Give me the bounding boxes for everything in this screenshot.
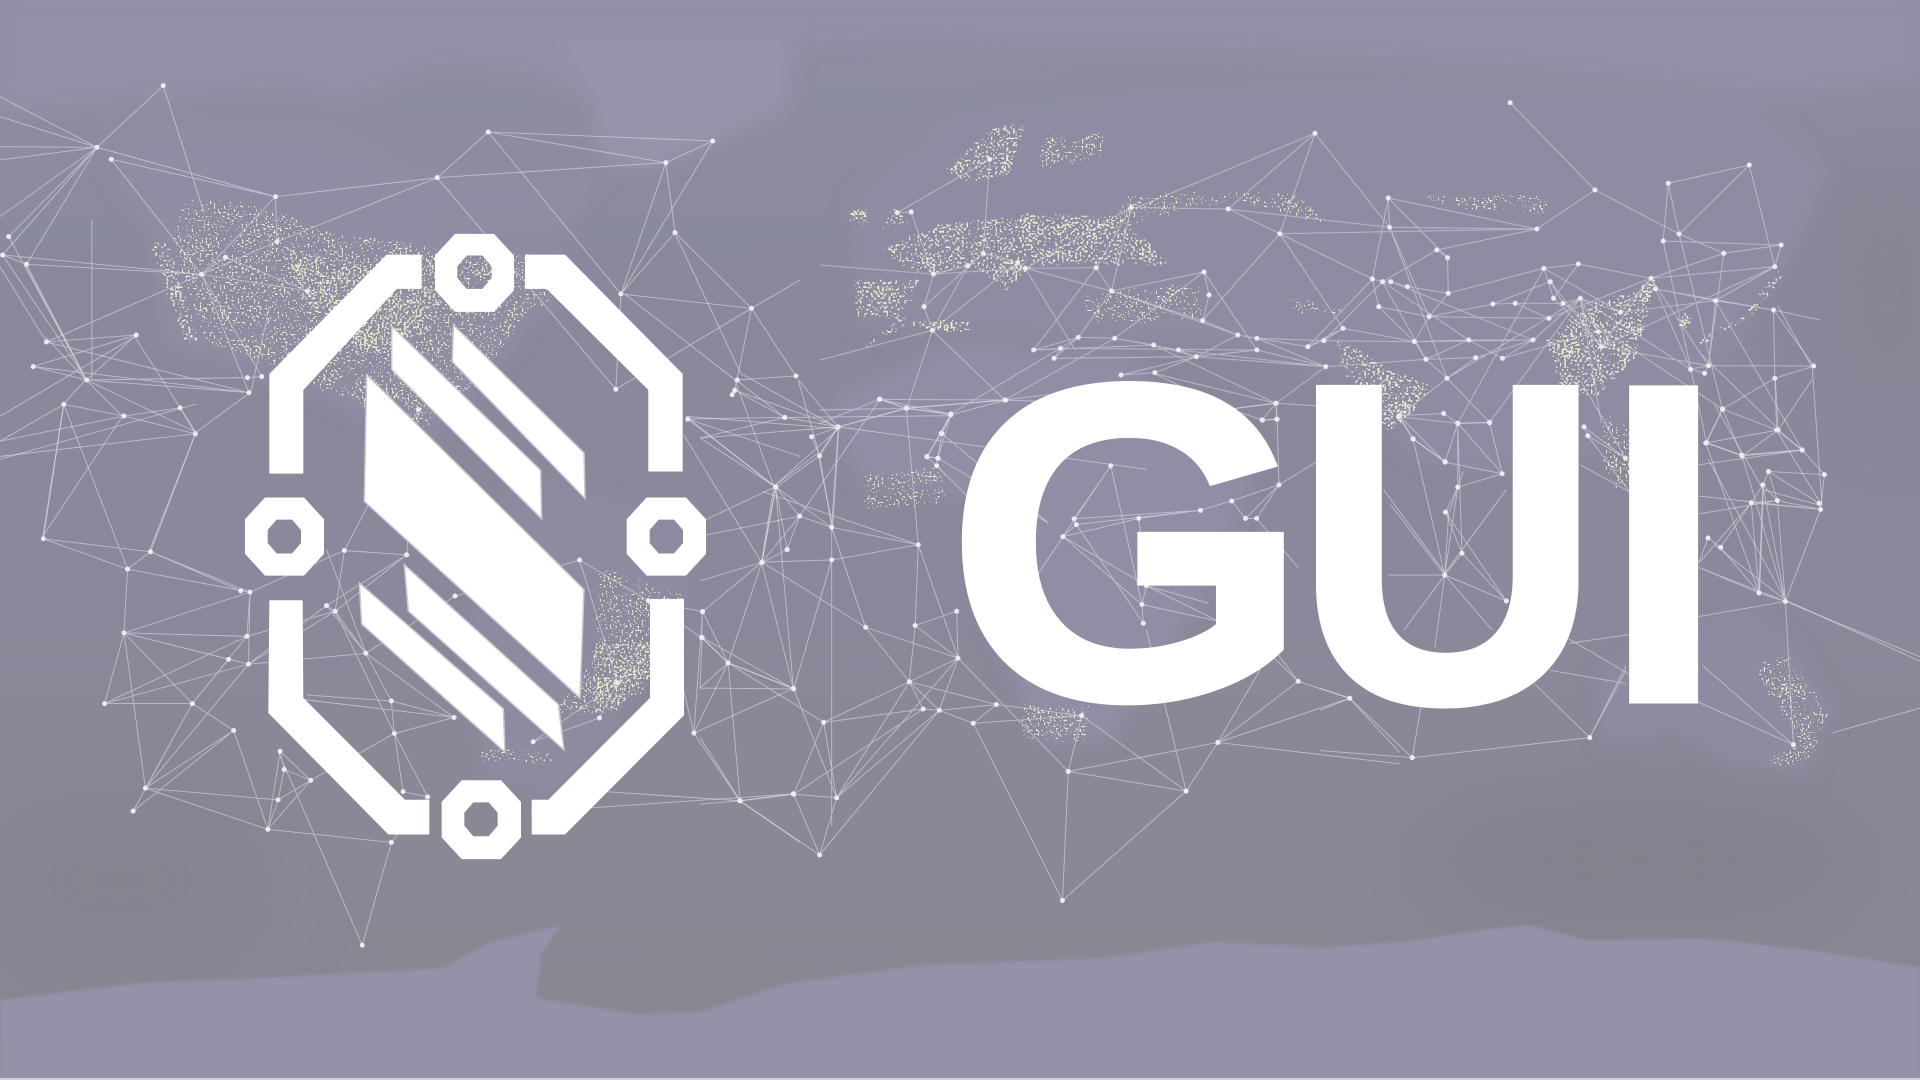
network: north-west lines and nodes: [0, 86, 800, 393]
logo: bottom ring: [442, 780, 521, 859]
antarctica: [0, 925, 1920, 1080]
logo: octagonal S emblem: [245, 234, 706, 859]
arctic ice and Greenland: [0, 0, 1920, 175]
network: south-east lines and nodes: [1320, 380, 1920, 758]
Eurasia landmass: [850, 80, 1830, 470]
network: central lines and nodes: [700, 380, 1400, 901]
background: darker ocean shading: [0, 170, 1920, 970]
South America landmass: [470, 470, 690, 800]
logo: right ring: [627, 498, 706, 576]
bottom edge line: [0, 1078, 1920, 1080]
title: GUI wordmark: G: [946, 291, 1310, 794]
title: GUI wordmark: U: [1292, 289, 1603, 800]
Greenland highlight: [560, 40, 790, 170]
logo: top-right bracket: [525, 255, 683, 471]
logo: left ring: [245, 498, 324, 576]
city lights: dense clusters: [146, 120, 1789, 720]
network: connecting links across regions: [0, 230, 1920, 661]
logo: bottom-right bracket: [532, 599, 684, 834]
title: GUI wordmark: [946, 288, 1727, 800]
city lights: sparse clusters: [165, 125, 1836, 773]
network: south-west lines and nodes: [0, 404, 800, 945]
logo: top-left bracket: [269, 255, 422, 474]
network: north-east lines and nodes: [820, 103, 1820, 462]
Africa landmass: [830, 340, 1250, 745]
logo: bottom-left bracket: [268, 600, 429, 834]
title: GUI wordmark: I: [1600, 288, 1727, 800]
Australia landmass: [1595, 610, 1836, 775]
background: continents: [0, 0, 1920, 800]
logo: top ring: [435, 234, 514, 312]
North America landmass: [100, 115, 600, 450]
logo: diagonal stripes: [359, 325, 585, 752]
